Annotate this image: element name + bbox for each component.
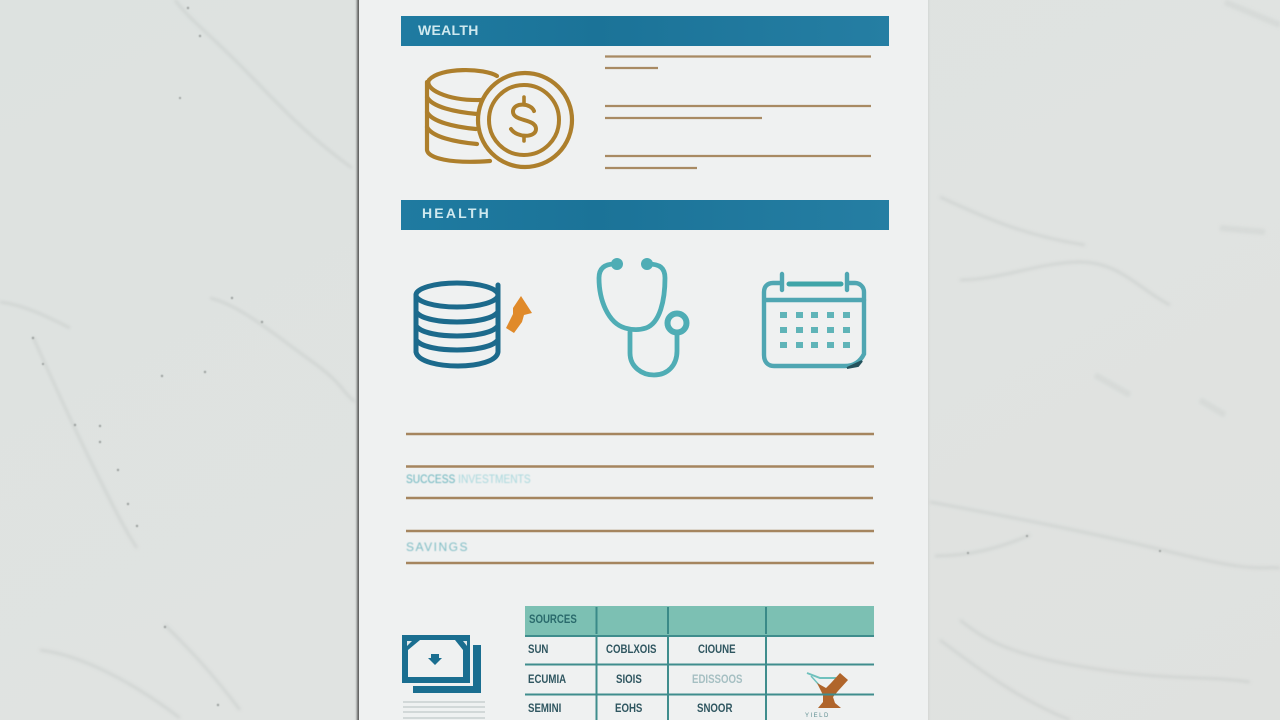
table header text: SOURCES — [529, 614, 577, 626]
icon: coins with dollar — [424, 68, 574, 170]
table header band — [525, 606, 874, 636]
text lines: wealth details — [605, 55, 871, 170]
heading: health: HEALTH — [422, 205, 491, 221]
table row 3: SEMINI — [528, 703, 561, 715]
icon: calendar — [762, 272, 866, 369]
ruled lines with labels — [406, 432, 874, 564]
icon: orange forked mark — [805, 672, 848, 719]
icon: orange arrow — [506, 296, 532, 333]
table: sources: EOHS — [615, 703, 642, 715]
heading: wealth: WEALTH — [418, 22, 479, 38]
label: second ruled row: SAVINGS — [406, 540, 469, 554]
icon: orange forked mark: YIELD — [805, 713, 830, 719]
table row 2: ECUMIA — [528, 674, 566, 686]
table: sources: SNOOR — [697, 703, 732, 715]
table: sources: SIOIS — [616, 674, 642, 686]
table: sources: COBLXOIS — [606, 644, 656, 656]
heading: wealth — [401, 16, 889, 46]
table: sources: EDISSOOS — [692, 674, 742, 686]
icon: stacked discs with orange arrow — [414, 280, 532, 368]
table grid — [525, 607, 874, 720]
table: sources — [525, 606, 874, 720]
icon: banknotes — [402, 635, 481, 693]
icon: stethoscope — [596, 258, 690, 378]
heading: health — [401, 200, 889, 230]
paper sheet — [359, 0, 928, 720]
table row 1: SUN — [528, 644, 548, 656]
label: first ruled row: SUCCESS INVESTMENTS — [406, 472, 531, 486]
text lines: below banknotes — [403, 701, 485, 719]
table: sources: CIOUNE — [698, 644, 736, 656]
